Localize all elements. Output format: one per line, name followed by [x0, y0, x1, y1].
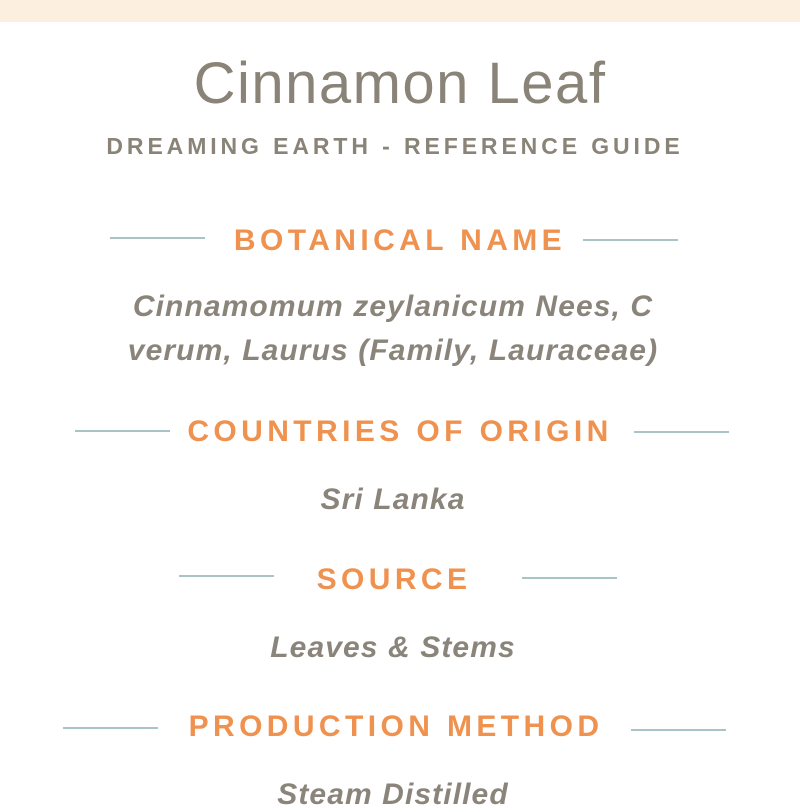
title: Cinnamon Leaf [194, 51, 606, 116]
text: botanical name: verum, Laurus (Family, Lauraceae) [128, 334, 658, 367]
text: production method: Steam Distilled [277, 778, 509, 811]
heading: source: SOURCE [317, 563, 471, 596]
heading: production method: PRODUCTION METHOD [189, 710, 603, 743]
text: botanical name [128, 290, 658, 367]
section: production method [63, 710, 726, 811]
section: source [179, 563, 617, 664]
heading: botanical name: BOTANICAL NAME [234, 224, 566, 257]
text: botanical name: Cinnamomum zeylanicum Nees, C [133, 290, 653, 323]
section: countries of origin [75, 415, 729, 516]
subtitle: DREAMING EARTH - REFERENCE GUIDE [106, 133, 684, 159]
text: countries: Sri Lanka [321, 483, 465, 516]
text: source: Leaves & Stems [270, 631, 516, 664]
heading: countries: COUNTRIES OF ORIGIN [187, 415, 613, 448]
section: botanical name [110, 224, 678, 367]
top banner [0, 0, 800, 22]
